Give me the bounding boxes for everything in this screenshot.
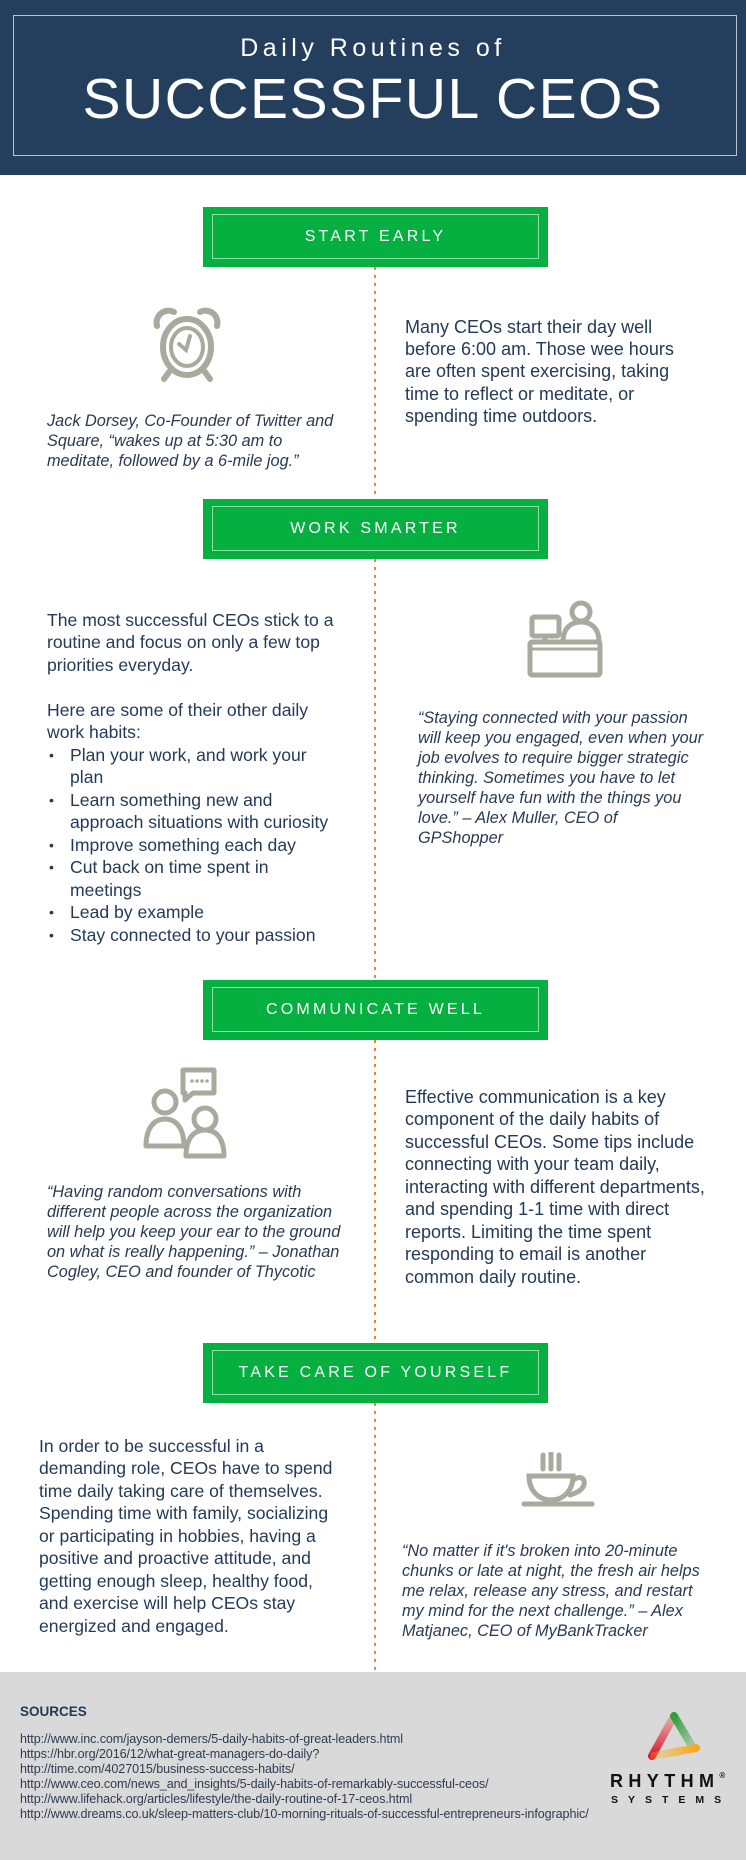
text: source urls: http://www.lifehack.org/articles/lifestyle/the-daily-routine-of-17-ceos.html — [20, 1792, 412, 1806]
text: start early — [405, 316, 674, 426]
text: work smarter list: Learn something new and — [70, 790, 272, 810]
heading: communicate well: COMMUNICATE WELL — [266, 1001, 485, 1018]
text: communicate well — [405, 1086, 705, 1287]
text: work smarter list: approach situations with curiosity — [70, 812, 328, 832]
text: work smarter list: Lead by example — [70, 902, 204, 922]
quote: Alex Muller: will keep you engaged, even when your — [418, 729, 703, 747]
text: work smarter list: Plan your work, and work your — [70, 744, 307, 764]
heading: take care of yourself — [203, 1343, 548, 1403]
text: communicate well: common daily routine. — [405, 1266, 581, 1286]
text: start early: time to reflect or meditate, or — [405, 384, 634, 404]
quote: Alex Muller: thinking. Sometimes you have to let — [418, 769, 675, 787]
heading: sources: SOURCES — [20, 1704, 87, 1719]
quote: Alex Muller: GPShopper — [418, 829, 503, 847]
heading: start early: START EARLY — [305, 228, 446, 245]
text: source urls — [20, 1732, 589, 1821]
text: source urls: http://www.dreams.co.uk/sleep-matters-club/10-morning-rituals-of-successful-entrepreneurs-infographic/ — [20, 1807, 589, 1821]
text: source urls: http://time.com/4027015/business-success-habits/ — [20, 1762, 295, 1776]
heading: work smarter: WORK SMARTER — [290, 520, 461, 537]
text: communicate well: interacting with different departments, — [405, 1176, 705, 1196]
text: communicate well: reports. Limiting the time spent — [405, 1222, 651, 1242]
text: communicate well: responding to email is another — [405, 1244, 646, 1264]
quote: Alex Matjanec: my mind for the next challenge.” – Alex — [402, 1602, 683, 1620]
text: communicate well: component of the daily habits of — [405, 1109, 659, 1129]
text: start early: before 6:00 am. Those wee hours — [405, 339, 674, 359]
text: source urls: http://www.ceo.com/news_and_insights/5-daily-habits-of-remarkably-successful-ceos/ — [20, 1777, 488, 1791]
text: work smarter list: meetings — [70, 880, 141, 900]
logo: rhythm systems — [610, 1712, 731, 1806]
text: communicate well: Effective communication is a key — [405, 1086, 666, 1106]
quote: Alex Muller — [416, 709, 704, 847]
text: take care: In order to be successful in a — [39, 1436, 264, 1456]
heading: start early — [203, 207, 548, 267]
header banner — [0, 0, 746, 175]
text: source urls: http://www.inc.com/jayson-demers/5-daily-habits-of-great-leaders.html — [20, 1732, 403, 1746]
text: communicate well: successful CEOs. Some tips include — [405, 1132, 694, 1152]
text: communicate well: and spending 1-1 time with direct — [405, 1199, 669, 1219]
text: source urls: https://hbr.org/2016/12/what-great-managers-do-daily? — [20, 1747, 319, 1761]
quote: Alex Matjanec — [402, 1542, 700, 1640]
text: take care: getting enough sleep, healthy food, — [39, 1570, 313, 1590]
heading: work smarter — [203, 499, 548, 559]
quote: Jack Dorsey: Jack Dorsey, Co-Founder of Twitter and — [47, 412, 333, 430]
text: take care: positive and proactive attitude, and — [39, 1548, 311, 1568]
quote: Alex Matjanec: me relax, release any stress, and restart — [402, 1582, 692, 1600]
icon: coffee cup — [522, 1452, 594, 1506]
quote: Jack Dorsey — [47, 412, 334, 470]
text: work smarter list: work habits: — [47, 722, 141, 742]
title: subtitle: Daily Routines of — [240, 34, 506, 62]
text: work smarter list — [47, 610, 334, 944]
text: start early: are often spent exercising, taking — [405, 361, 669, 381]
icon: desk with person — [528, 600, 602, 678]
text: take care: time daily taking care of themselves. — [39, 1480, 323, 1500]
quote: Alex Muller: love.” – Alex Muller, CEO of — [418, 809, 617, 827]
text: work smarter list: Cut back on time spent in — [70, 857, 269, 877]
quote: Jonathan Cogley — [47, 1183, 341, 1281]
text: take care: energized and engaged. — [39, 1616, 229, 1636]
quote: Jonathan Cogley: Cogley, CEO and founder of Thycotic — [47, 1263, 315, 1281]
heading: take care of yourself: TAKE CARE OF YOURSELF — [239, 1364, 512, 1381]
text: work smarter list: Improve something each day — [70, 834, 296, 854]
quote: Alex Muller: “Staying connected with your passion — [418, 709, 688, 727]
icon: alarm clock — [154, 308, 220, 382]
text: work smarter list: plan — [70, 767, 103, 787]
quote: Alex Matjanec: Matjanec, CEO of MyBankTracker — [402, 1622, 648, 1640]
text: take care: demanding role, CEOs have to spend — [39, 1458, 332, 1478]
text: communicate well: connecting with your team daily, — [405, 1154, 660, 1174]
quote: Jonathan Cogley: will help you keep your ear to the ground — [47, 1223, 340, 1241]
panel: sources — [0, 1672, 746, 1860]
quote: Alex Muller: job evolves to require bigger strategic — [418, 749, 689, 767]
quote: Jonathan Cogley: on what is really happening.” – Jonathan — [47, 1243, 339, 1261]
logo: rhythm systems: SYSTEMS — [611, 1794, 731, 1806]
text: work smarter list: The most successful CEOs stick to a — [47, 610, 333, 630]
quote: Alex Matjanec: chunks or late at night, the fresh air helps — [402, 1562, 700, 1580]
text: work smarter list: routine and focus on only a few top — [47, 632, 320, 652]
text: take care: and exercise will help CEOs stay — [39, 1593, 295, 1613]
quote: Jonathan Cogley: “Having random conversations with — [47, 1183, 301, 1201]
quote: Jack Dorsey: Square, “wakes up at 5:30 am to — [47, 432, 282, 450]
text: work smarter list: priorities everyday. — [47, 654, 193, 674]
quote: Jonathan Cogley: different people across the organization — [47, 1203, 332, 1221]
text: take care — [39, 1436, 332, 1636]
text: take care: or participating in hobbies, having a — [39, 1526, 316, 1546]
icon: conversation people — [144, 1068, 226, 1158]
logo: rhythm systems: RHYTHM® — [610, 1771, 725, 1791]
text: start early: spending time outdoors. — [405, 406, 597, 426]
text: take care: Spending time with family, socializing — [39, 1503, 328, 1523]
quote: Jack Dorsey: meditate, followed by a 6-mile jog.” — [47, 452, 299, 470]
heading: communicate well — [203, 980, 548, 1040]
text: work smarter list: Here are some of their other daily — [47, 700, 308, 720]
title: main: SUCCESSFUL CEOS — [82, 67, 664, 131]
text: work smarter list: Stay connected to your passion — [70, 924, 316, 944]
text: start early: Many CEOs start their day well — [405, 316, 652, 336]
quote: Alex Muller: yourself have fun with the things you — [418, 789, 681, 807]
quote: Alex Matjanec: “No matter if it's broken into 20-minute — [402, 1542, 677, 1560]
